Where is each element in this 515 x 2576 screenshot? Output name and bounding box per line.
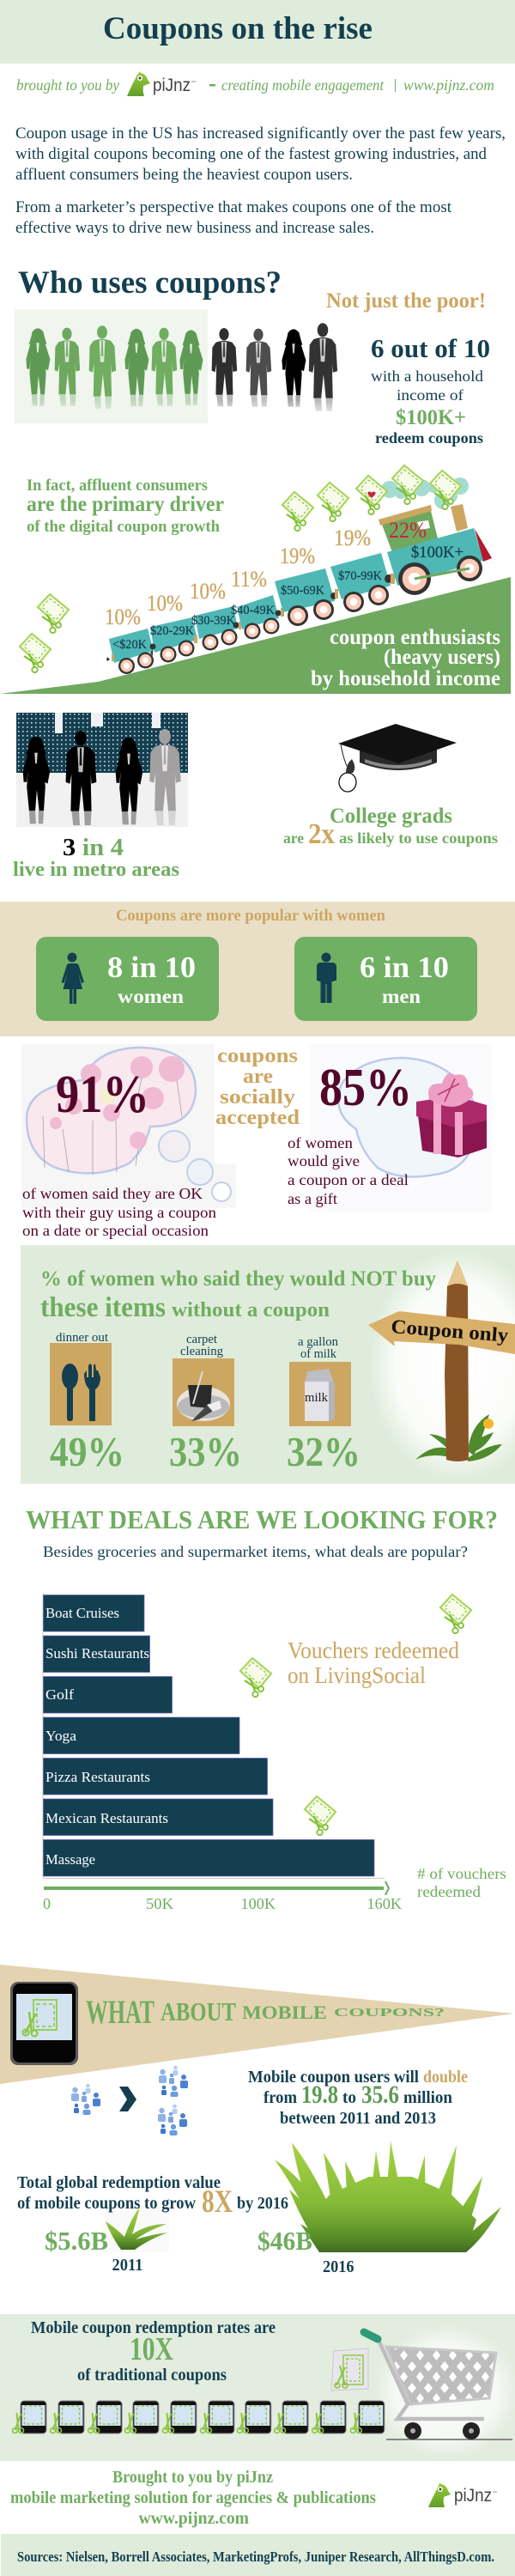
train percentages: 11%	[231, 567, 267, 592]
coupon icons	[20, 483, 348, 672]
text: coupons are socially accepted	[215, 1045, 300, 1129]
panel: would not buy without a coupon	[21, 1245, 515, 1484]
text: 10X	[31, 2318, 276, 2385]
icon: milk carton: milk	[305, 1391, 328, 1405]
text: give coupon as gift: a coupon or a deal	[288, 1171, 409, 1188]
text: mobile users double: to	[342, 2088, 356, 2107]
train percentages: 10%	[190, 579, 226, 604]
bar chart: vouchers redeemed: Mexican Restaurants	[45, 1810, 168, 1826]
intro text: with digital coupons becoming one of the fastest growing industries, and	[15, 146, 488, 163]
tagline with logo: brought to you by	[16, 76, 119, 94]
subheading: not just the poor: Not just the poor!	[326, 289, 486, 313]
hill caption: (heavy users)	[384, 646, 500, 669]
car: under 20K: <$20K	[112, 638, 147, 652]
heading: these items	[40, 1292, 166, 1323]
illustration: speech bubble with flowers	[21, 1044, 236, 1208]
text: OK with guy using a coupon: of women said they are OK	[22, 1185, 203, 1202]
icon: milk carton	[305, 1369, 335, 1421]
intro text: effective ways to drive new business and increase sales.	[15, 220, 374, 237]
car: 30-39K: $30-39K	[191, 614, 235, 628]
train percentages: 19%	[280, 544, 315, 568]
item: carpet cleaning: cleaning	[180, 1345, 223, 1358]
axis labels: 100K	[240, 1895, 276, 1912]
stat: 85%: 85%	[319, 1059, 412, 1117]
stat: 2011 value: 2011	[112, 2256, 142, 2275]
engine	[379, 504, 492, 595]
text: global redemption value: by 2016	[237, 2194, 288, 2213]
item: gallon of milk: a gallon	[298, 1335, 338, 1349]
footer logo: sm	[493, 2489, 498, 2494]
panel: women vs men	[0, 902, 515, 1036]
train percentages	[105, 526, 371, 629]
pennant banner	[0, 1965, 514, 2084]
text: affluent consumers	[27, 477, 224, 536]
text: mobile users double: between 2011 and 2013	[280, 2109, 436, 2128]
phones row	[12, 2401, 385, 2433]
metro photo	[16, 713, 188, 827]
bar chart: vouchers redeemed: Yoga	[45, 1728, 76, 1744]
stat: 6 out of 10: 6 out of 10	[371, 333, 490, 363]
engine: 22%	[389, 518, 427, 543]
footer credit: Brought to you by piJnz	[112, 2468, 273, 2487]
text: mobile users double: Mobile coupon users will	[248, 2068, 419, 2087]
text: mobile users double	[248, 2068, 468, 2128]
stat: college grads: College grads	[330, 805, 452, 828]
text: give coupon as gift: as a gift	[288, 1190, 337, 1207]
bar chart: vouchers redeemed	[43, 1593, 506, 1912]
chart title	[288, 1637, 459, 1688]
coupon icons above engine	[356, 465, 461, 514]
text: coupons are socially accepted: accepted	[215, 1107, 300, 1129]
car: under 20K	[106, 629, 154, 674]
heading: without a coupon	[172, 1299, 330, 1321]
footer logo	[428, 2482, 498, 2507]
stat: 2016 value: 2016	[323, 2257, 354, 2276]
text: coupons are socially accepted: coupons	[217, 1045, 298, 1067]
text: affluent consumers: of the digital coupon growth	[27, 518, 220, 536]
item: carpet cleaning	[169, 1333, 242, 1475]
stat: 3 in 4	[13, 834, 179, 881]
card: women: 8 in 10	[107, 951, 196, 984]
icon: gift box	[416, 1073, 487, 1157]
card: men	[294, 937, 477, 1021]
heading: % of women who said they would NOT buy	[40, 1267, 436, 1291]
train smoke	[381, 477, 469, 509]
header band	[0, 0, 515, 64]
tagline with logo: www.pijnz.com	[403, 76, 494, 94]
engine: $100K+	[411, 544, 464, 562]
chart title: on LivingSocial	[288, 1662, 426, 1688]
bar chart: vouchers redeemed: Massage	[45, 1851, 95, 1868]
hill caption	[311, 626, 500, 690]
train percentages: 10%	[147, 591, 183, 616]
heading	[40, 1267, 436, 1323]
heading: what about mobile coupons: WHAT	[86, 1994, 154, 2031]
item: dinner out	[50, 1331, 124, 1475]
text: mobile users double: million	[403, 2088, 452, 2107]
illustration: large grass	[275, 2141, 501, 2252]
heading: what about mobile coupons	[86, 1994, 445, 2031]
text: 10X: 10X	[130, 2331, 173, 2367]
chart title: Vouchers redeemed	[288, 1637, 459, 1663]
intro text	[15, 125, 506, 237]
train	[106, 504, 492, 674]
coupon icons around chart	[240, 1595, 471, 1835]
signpost	[368, 1261, 515, 1461]
card: men: 6 in 10	[360, 951, 449, 984]
logo: piJnz bird: sm	[191, 79, 197, 83]
intro text: Coupon usage in the US has increased significantly over the past few years,	[15, 125, 506, 143]
panel: redemption rates	[0, 2314, 515, 2461]
footer credit: www.pijnz.com	[139, 2509, 249, 2528]
stat: 6 out of 10: with a household	[371, 368, 483, 385]
logo: piJnz bird: piJnz	[153, 76, 191, 95]
car: 50-69K: $50-69K	[281, 584, 324, 598]
intro text: affluent consumers being the heaviest coupon users.	[15, 167, 353, 184]
text: affluent consumers: In fact, affluent consumers	[27, 477, 208, 495]
stat: 3 in 4: 3 in 4	[63, 834, 124, 861]
stat: college grads	[283, 805, 498, 850]
bar chart: vouchers redeemed: Sushi Restaurants	[45, 1645, 149, 1662]
item: dinner out: 49%	[50, 1428, 124, 1475]
heading: what about mobile coupons: ABOUT	[161, 1996, 236, 2026]
people silhouettes: green group	[15, 309, 208, 423]
footer logo: piJnz	[454, 2486, 492, 2506]
car: 20-29K: $20-29K	[150, 624, 194, 638]
axis labels: 160K	[367, 1895, 402, 1912]
stat: 6 out of 10: $100K+	[396, 406, 466, 429]
item: gallon of milk: of milk	[300, 1347, 336, 1361]
tagline with logo	[16, 71, 494, 96]
text: 10X: Mobile coupon redemption rates are	[31, 2318, 276, 2337]
stat: 91%: 91%	[56, 1066, 149, 1124]
heading: who uses coupons: Who uses coupons?	[18, 265, 282, 301]
item: dinner out: dinner out	[56, 1331, 109, 1345]
axis labels: 50K	[146, 1895, 173, 1912]
tagline with logo: creating mobile engagement	[221, 76, 385, 94]
car: 30-39K	[191, 606, 241, 651]
train percentages: 19%	[334, 526, 371, 550]
intro text: From a marketer’s perspective that makes coupons one of the most	[15, 199, 452, 216]
bar chart: vouchers redeemed: Golf	[45, 1686, 74, 1703]
text: mobile users double: from	[264, 2088, 297, 2107]
stat: 6 out of 10	[371, 333, 490, 447]
text: OK with guy using a coupon: with their guy using a coupon	[22, 1204, 216, 1221]
heading: what about mobile coupons: COUPONS?	[334, 2007, 445, 2020]
text: coupons are socially accepted: socially	[220, 1086, 295, 1109]
text: global redemption value: of mobile coupons to grow	[17, 2194, 197, 2213]
car: 20-29K	[149, 617, 197, 663]
text: global redemption value: Total global redemption value	[17, 2173, 221, 2192]
heading: what deals: WHAT DEALS ARE WE LOOKING FOR?	[26, 1504, 498, 1534]
icon: spoon and fork	[62, 1364, 100, 1421]
hill caption: by household income	[311, 667, 500, 690]
stat: 3 in 4: live in metro areas	[13, 859, 179, 881]
axis arrow	[44, 1881, 389, 1895]
axis labels: # of vouchers	[417, 1865, 506, 1882]
card: women	[36, 937, 219, 1021]
icon: shopping cart	[364, 2324, 515, 2458]
car: 40-49K: $40-49K	[231, 604, 275, 617]
stat: 2016 value: $46B	[258, 2226, 312, 2256]
axis labels	[43, 1865, 506, 1912]
stat: college grads: 2x	[308, 818, 335, 850]
train percentages: 10%	[105, 605, 141, 629]
card: women: women	[118, 986, 184, 1007]
stat: 2011 value	[45, 2226, 142, 2275]
text: give coupon as gift	[288, 1134, 409, 1207]
icon: user growth	[71, 2066, 188, 2136]
heading: what about mobile coupons: MOBILE	[242, 2002, 327, 2023]
signpost: Coupon only	[391, 1315, 510, 1346]
text: global redemption value: 8X	[202, 2184, 233, 2220]
subheading: Besides groceries and supermarket items, what deals are popular?	[43, 1543, 468, 1560]
illustration: small grass	[105, 2204, 169, 2252]
sources panel	[1, 2534, 515, 2576]
text: mobile users double: double	[423, 2068, 468, 2087]
text: OK with guy using a coupon	[22, 1185, 216, 1239]
title: Coupons on the rise	[103, 11, 373, 46]
illustration: bubble with gift	[309, 1044, 492, 1212]
heading: Coupons are more popular with women	[116, 907, 385, 925]
footer credit: mobile marketing solution for agencies & publications	[10, 2488, 376, 2507]
text: give coupon as gift: of women	[288, 1134, 353, 1151]
bar chart: vouchers redeemed: Pizza Restaurants	[45, 1769, 150, 1785]
grass at post	[415, 1414, 502, 1461]
axis labels: 0	[43, 1895, 51, 1912]
text: global redemption value	[17, 2173, 288, 2220]
axis labels: redeemed	[417, 1883, 481, 1900]
text: give coupon as gift: would give	[288, 1152, 360, 1170]
text: OK with guy using a coupon: on a date or special occasion	[22, 1222, 209, 1239]
car: 50-69K	[275, 568, 338, 626]
item: carpet cleaning: carpet	[186, 1333, 218, 1346]
icon: paper coupon	[331, 2348, 368, 2391]
stat: college grads: are	[283, 829, 304, 847]
card: men: men	[382, 986, 421, 1007]
item: gallon of milk	[287, 1335, 360, 1475]
icon: mop and bucket	[177, 1371, 230, 1421]
stat: 6 out of 10: income of	[397, 386, 464, 404]
stat: 6 out of 10: redeem coupons	[375, 429, 483, 447]
stat: college grads: as likely to use coupons	[339, 829, 498, 847]
hill	[0, 577, 511, 694]
people silhouettes: black group	[210, 323, 339, 419]
logo: piJnz bird	[127, 71, 197, 96]
car: 40-49K	[231, 595, 284, 639]
text: coupons are socially accepted: are	[243, 1066, 273, 1088]
icon: graduation cap	[338, 724, 457, 792]
footer credit	[10, 2468, 376, 2528]
car: 70-99K: $70-99K	[338, 569, 382, 583]
hill caption: coupon enthusiasts	[330, 626, 500, 649]
bar chart: vouchers redeemed: Boat Cruises	[45, 1605, 119, 1621]
item: gallon of milk: 32%	[287, 1428, 360, 1475]
stat: 2016 value	[258, 2226, 354, 2276]
text: affluent consumers: are the primary driver	[27, 493, 224, 516]
text: mobile users double: 19.8	[301, 2081, 338, 2109]
item: carpet cleaning: 33%	[169, 1428, 242, 1475]
car: 70-99K	[330, 553, 395, 612]
text: mobile users double: 35.6	[361, 2081, 399, 2109]
stat: 2011 value: $5.6B	[45, 2226, 108, 2256]
text: 10X: of traditional coupons	[77, 2366, 227, 2385]
icon: smartphone with coupon	[10, 1982, 78, 2065]
